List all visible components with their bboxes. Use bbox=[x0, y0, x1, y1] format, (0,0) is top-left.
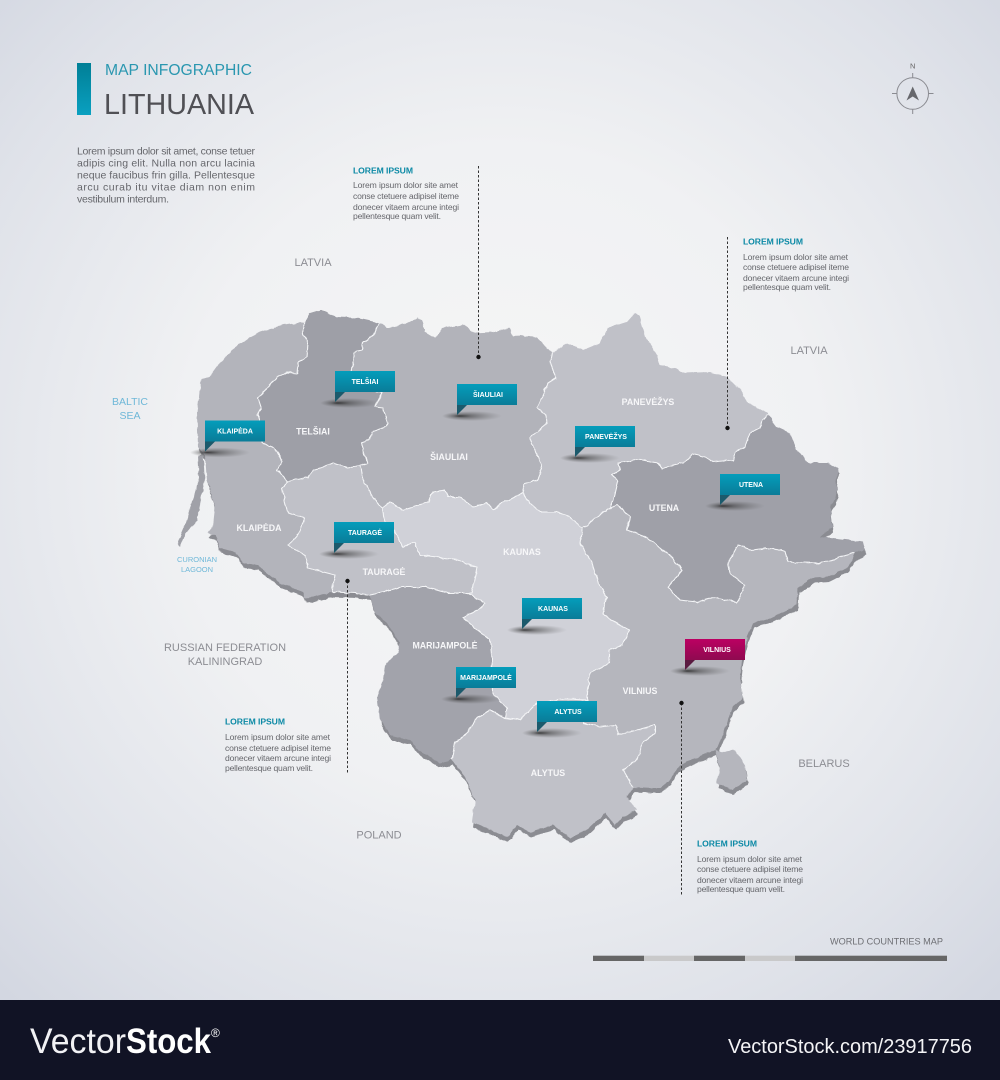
title block bbox=[77, 62, 255, 121]
footer logo: VectorStock bbox=[30, 1022, 221, 1061]
text block: top right: conse ctetuere adipisel iteme bbox=[743, 262, 849, 272]
text block: bottom right: pellentesque quam velit. bbox=[697, 884, 785, 894]
scale bar bbox=[593, 936, 947, 961]
text block: bottom left: donecer vitaem arcune integi bbox=[225, 753, 331, 763]
water labels: SEA bbox=[119, 410, 141, 422]
region: Panevezys bbox=[522, 313, 768, 528]
flag: Klaipeda: KLAIPĖDA bbox=[217, 428, 253, 436]
flag: Alytus bbox=[522, 701, 597, 738]
region labels: MARIJAMPOLĖ bbox=[412, 640, 478, 650]
scale bar: WORLD COUNTRIES MAP bbox=[830, 936, 943, 948]
text block: top centre: donecer vitaem arcune integi bbox=[353, 202, 459, 212]
region labels bbox=[237, 396, 680, 778]
flag: Panevezys bbox=[560, 426, 635, 463]
text block: top right: Lorem ipsum dolor site amet bbox=[743, 252, 849, 262]
text block: bottom right: donecer vitaem arcune integi bbox=[697, 875, 803, 885]
callout: Siauliai leader bbox=[476, 166, 481, 359]
region: Kaunas bbox=[382, 490, 629, 720]
region: Vilnius bbox=[580, 505, 855, 790]
text block: top right: pellentesque quam velit. bbox=[743, 282, 831, 292]
region: Marijampole bbox=[370, 587, 507, 763]
flag: Telsiai: TELŠIAI bbox=[352, 377, 378, 386]
flag: Taurage bbox=[319, 522, 394, 559]
neighbouring country labels: LATVIA bbox=[790, 345, 828, 357]
map of Lithuania bbox=[178, 310, 866, 843]
title: LITHUANIA bbox=[104, 89, 255, 121]
flag: Kaunas: KAUNAS bbox=[538, 606, 568, 613]
region labels: ALYTUS bbox=[531, 768, 565, 778]
region labels: TELŠIAI bbox=[296, 426, 330, 436]
neighbouring country labels: RUSSIAN FEDERATION bbox=[164, 642, 286, 654]
text block: top centre: pellentesque quam velit. bbox=[353, 211, 441, 221]
water labels: BALTIC bbox=[112, 396, 148, 408]
subtitle: MAP INFOGRAPHIC bbox=[105, 62, 252, 79]
region: Telsiai bbox=[257, 310, 388, 482]
flag: Siauliai: ŠIAULIAI bbox=[473, 390, 503, 399]
text block: top centre: LOREM IPSUM bbox=[353, 166, 413, 176]
intro paragraph: Lorem ipsum dolor sit amet, conse tetuer bbox=[77, 146, 256, 158]
flag: Alytus: ALYTUS bbox=[554, 709, 582, 716]
text block: bottom left: pellentesque quam velit. bbox=[225, 763, 313, 773]
intro paragraph: neque faucibus frin gilla. Pellentesque bbox=[77, 170, 255, 182]
map shapes bbox=[178, 310, 866, 843]
flag: Panevezys: PANEVĖŽYS bbox=[585, 432, 627, 441]
title accent bar bbox=[77, 63, 91, 115]
text block: bottom right: Lorem ipsum dolor site amet bbox=[697, 854, 803, 864]
flag: Klaipeda bbox=[190, 420, 265, 458]
neighbouring country labels: KALININGRAD bbox=[188, 656, 262, 668]
spit: Curonian bbox=[178, 455, 205, 547]
intro paragraph: adipis cing elit. Nulla non arcu lacinia bbox=[77, 158, 255, 170]
region labels: UTENA bbox=[649, 503, 680, 513]
text block: bottom right: LOREM IPSUM bbox=[697, 838, 757, 848]
neighbouring country labels: POLAND bbox=[356, 830, 402, 842]
flag: Utena: UTENA bbox=[739, 482, 763, 489]
flag: Utena bbox=[705, 474, 780, 511]
region labels: ŠIAULIAI bbox=[430, 451, 468, 462]
callout: Taurage leader bbox=[345, 579, 350, 773]
region: Siauliai bbox=[348, 317, 556, 510]
text block: bottom right bbox=[697, 838, 803, 894]
water labels: LAGOON bbox=[181, 565, 213, 574]
intro paragraph: arcu curab itu vitae diam non enim bbox=[77, 182, 255, 194]
text block: top centre: Lorem ipsum dolor site amet bbox=[353, 180, 459, 190]
water labels bbox=[112, 396, 217, 574]
flag: Marijampole bbox=[441, 667, 516, 704]
text block: top centre: conse ctetuere adipisel iteme bbox=[353, 191, 459, 201]
footer id: VectorStock.com/23917756 bbox=[728, 1036, 972, 1058]
flag: Marijampole: MARIJAMPOLĖ bbox=[460, 674, 512, 682]
region: Utena bbox=[610, 415, 865, 602]
text block: top right: LOREM IPSUM bbox=[743, 236, 803, 246]
text block: bottom left bbox=[225, 716, 331, 773]
neighbouring country labels bbox=[164, 257, 850, 842]
flag: Telsiai bbox=[320, 371, 395, 408]
intro paragraph bbox=[77, 146, 256, 206]
region borders bbox=[257, 322, 855, 787]
callout: Panevezys leader bbox=[725, 237, 730, 430]
flag: Kaunas bbox=[507, 598, 582, 635]
region: Klaipeda bbox=[197, 322, 335, 598]
flag: Vilnius bbox=[670, 639, 745, 676]
text block: bottom left: Lorem ipsum dolor site amet bbox=[225, 732, 331, 742]
text block: bottom left: conse ctetuere adipisel iteme bbox=[225, 743, 331, 753]
neighbouring country labels: BELARUS bbox=[798, 758, 850, 770]
text block: top centre bbox=[353, 166, 459, 221]
flag: Vilnius: VILNIUS bbox=[703, 647, 731, 654]
water labels: CURONIAN bbox=[177, 555, 217, 564]
text block: bottom left: LOREM IPSUM bbox=[225, 716, 285, 726]
flag: Taurage: TAURAGĖ bbox=[348, 529, 382, 537]
flag: Siauliai bbox=[442, 384, 517, 421]
region labels: KLAIPĖDA bbox=[237, 523, 282, 533]
region labels: PANEVĖŽYS bbox=[622, 396, 674, 407]
region: Alytus bbox=[452, 699, 655, 838]
region labels: VILNIUS bbox=[623, 686, 657, 696]
map extrusion shadow bbox=[198, 315, 866, 843]
icon: compass bbox=[892, 62, 934, 114]
icon: compass: N bbox=[910, 62, 915, 70]
region labels: TAURAGĖ bbox=[363, 567, 406, 577]
text block: top right bbox=[743, 236, 849, 292]
region labels: KAUNAS bbox=[503, 547, 541, 557]
region: Taurage bbox=[282, 463, 477, 595]
intro paragraph: vestibulum interdum. bbox=[77, 194, 169, 206]
neighbouring country labels: LATVIA bbox=[294, 257, 332, 269]
text block: bottom right: conse ctetuere adipisel iteme bbox=[697, 864, 803, 874]
footer band bbox=[0, 1000, 1000, 1080]
footer logo: ® bbox=[211, 1026, 220, 1040]
text block: top right: donecer vitaem arcune integi bbox=[743, 273, 849, 283]
callout: Vilnius leader bbox=[679, 701, 684, 895]
